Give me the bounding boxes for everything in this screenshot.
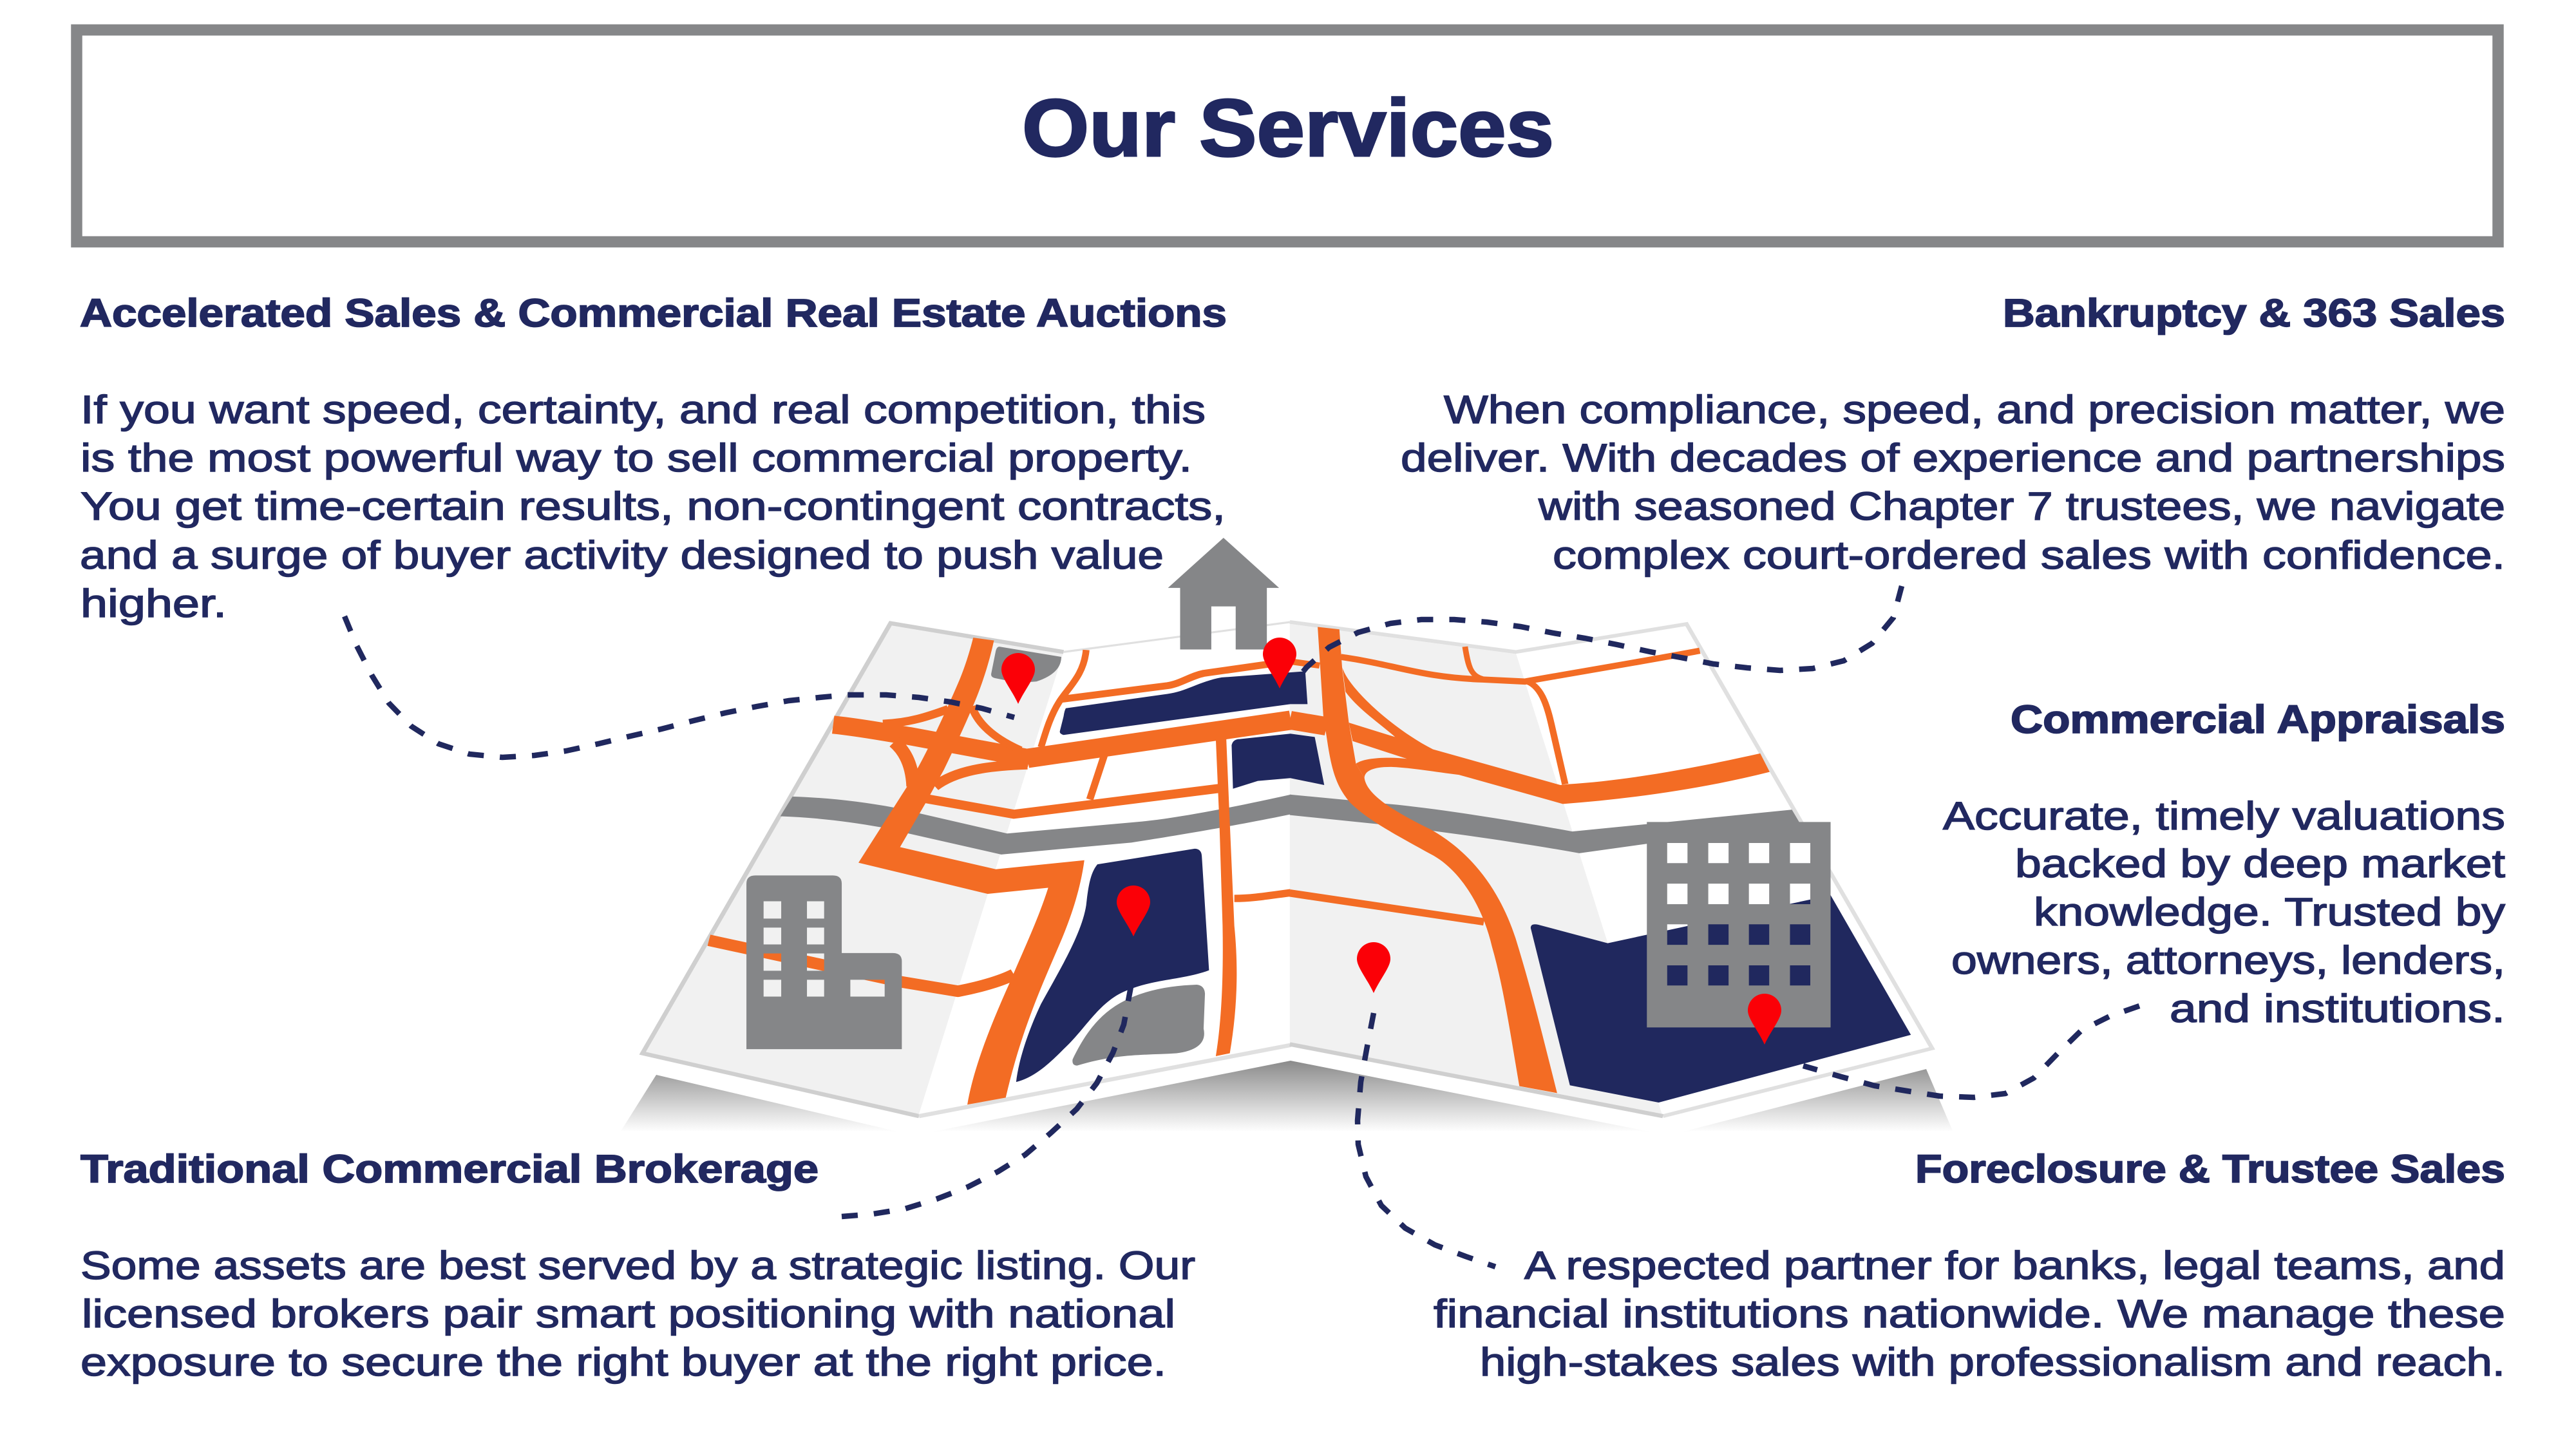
text block: foreclosure: financial institutions nationwide. We manage these bbox=[1434, 1292, 2505, 1336]
dashed connector: brokerage bbox=[842, 983, 1132, 1217]
icon: office tower bbox=[1647, 822, 1831, 1027]
text block: appraisals: backed by deep market bbox=[2015, 842, 2505, 886]
text block: bankruptcy: deliver. With decades of experience and partnerships bbox=[1401, 436, 2505, 480]
dashed connector: auctions bbox=[345, 616, 1014, 757]
navy block right bbox=[1531, 895, 1911, 1103]
grey road left bbox=[781, 795, 1291, 855]
grey lake upper bbox=[991, 647, 1061, 683]
text block: bankruptcy: with seasoned Chapter 7 trustees, we navigate bbox=[1538, 484, 2505, 528]
orange junction roads right bbox=[1342, 667, 1770, 804]
text block: bankruptcy: complex court-ordered sales with confidence. bbox=[1553, 533, 2505, 577]
text block: auctions: and a surge of buyer activity designed to push value bbox=[80, 533, 1164, 577]
text block: brokerage bbox=[80, 1244, 1195, 1384]
text block: auctions bbox=[80, 388, 1226, 625]
grey lake lower bbox=[1072, 985, 1205, 1066]
orange main road right bbox=[1318, 627, 1557, 1093]
grey road right bbox=[1290, 795, 1800, 853]
text block: appraisals: knowledge. Trusted by bbox=[2034, 890, 2506, 934]
text block: brokerage: Some assets are best served by a strategic listing. Our bbox=[80, 1244, 1195, 1287]
panel: foreclosure bbox=[1434, 1147, 2505, 1384]
title banner bbox=[77, 30, 2498, 242]
heading: auctions: Accelerated Sales & Commercial Real Estate Auctions bbox=[80, 291, 1227, 335]
text block: appraisals: Accurate, timely valuations bbox=[1943, 794, 2505, 838]
dashed connector: bankruptcy bbox=[1293, 586, 1902, 684]
navy block top bbox=[1060, 671, 1307, 735]
icon: house bbox=[1168, 538, 1279, 650]
icon: location pins bbox=[1001, 638, 1781, 1045]
panel: bankruptcy bbox=[1401, 291, 2505, 577]
icon: low-rise building bbox=[746, 875, 902, 1049]
text block: brokerage: licensed brokers pair smart positioning with national bbox=[82, 1292, 1175, 1336]
text block: brokerage: exposure to secure the right buyer at the right price. bbox=[80, 1340, 1166, 1384]
panel: brokerage bbox=[80, 1147, 1195, 1384]
text block: foreclosure bbox=[1434, 1244, 2505, 1384]
heading: foreclosure: Foreclosure & Trustee Sales bbox=[1915, 1147, 2505, 1191]
map features right bbox=[1284, 627, 1911, 1103]
text block: auctions: You get time-certain results, non-contingent contracts, bbox=[80, 484, 1226, 528]
text block: appraisals: owners, attorneys, lenders, bbox=[1951, 938, 2505, 982]
navy block middle bbox=[1231, 734, 1324, 789]
orange main road left bbox=[858, 638, 1084, 1104]
text block: appraisals bbox=[1943, 794, 2506, 1030]
text block: auctions: higher. bbox=[80, 582, 227, 625]
dashed connector: foreclosure bbox=[1358, 1013, 1495, 1267]
heading: brokerage: Traditional Commercial Brokerage bbox=[80, 1147, 819, 1191]
heading: appraisals: Commercial Appraisals bbox=[2011, 697, 2505, 741]
map illustration bbox=[620, 538, 1953, 1135]
dashed connector: appraisals bbox=[1803, 1006, 2139, 1097]
map right panels bbox=[1290, 621, 1935, 1116]
map left panels bbox=[639, 621, 1291, 1116]
map shadow bbox=[620, 1061, 1953, 1135]
text block: foreclosure: A respected partner for banks, legal teams, and bbox=[1524, 1244, 2505, 1287]
orange side roads left bbox=[833, 724, 1030, 759]
heading: bankruptcy: Bankruptcy & 363 Sales bbox=[2003, 291, 2505, 335]
text block: auctions: If you want speed, certainty, and real competition, this bbox=[80, 388, 1206, 431]
map features left bbox=[709, 638, 1324, 1104]
text block: bankruptcy: When compliance, speed, and precision matter, we bbox=[1444, 388, 2505, 431]
text block: auctions: is the most powerful way to sell commercial property. bbox=[80, 436, 1192, 480]
text block: appraisals: and institutions. bbox=[2170, 987, 2505, 1030]
title: Our Services bbox=[1022, 82, 1554, 173]
navy block large bbox=[1016, 849, 1209, 1082]
text block: bankruptcy bbox=[1401, 388, 2505, 577]
text block: foreclosure: high-stakes sales with professionalism and reach. bbox=[1480, 1340, 2505, 1384]
panel: auctions bbox=[80, 291, 1227, 625]
panel: appraisals bbox=[1943, 697, 2506, 1030]
